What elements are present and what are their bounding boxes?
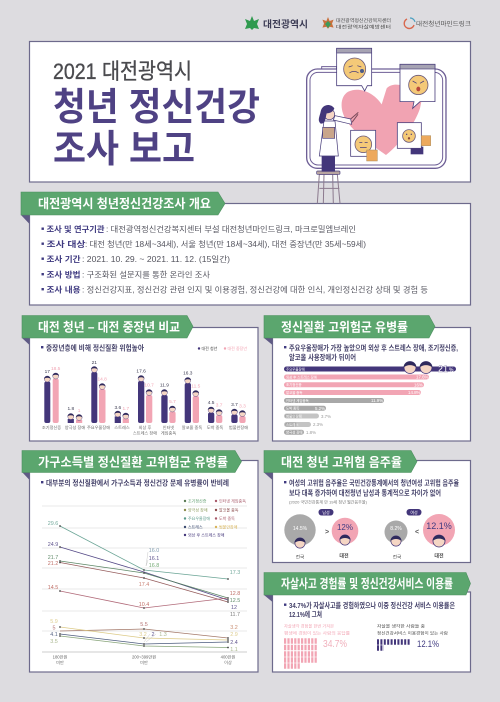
section tab: survey overview	[21, 192, 225, 224]
bar chart: 11.5	[191, 384, 201, 390]
bar chart: 3.3	[239, 404, 246, 410]
text: survey target: : 대전 청년(만 18세~34세), 서울 청년(만 18세~34세), 대전 중장년(만 35세~59세)	[85, 239, 366, 249]
comparison: male	[284, 509, 358, 560]
line chart: 10.4	[139, 602, 149, 608]
line chart: 17.3	[230, 570, 240, 576]
text: survey method	[42, 270, 210, 280]
line chart: 16.8	[149, 563, 159, 569]
bar chart: 1	[78, 408, 81, 414]
bubble: angry face	[400, 64, 435, 108]
x axis labels: 180만원	[53, 654, 67, 660]
lead text	[284, 601, 455, 619]
comparison: female: <	[415, 529, 419, 536]
horizontal bar chart: 스트레스	[286, 422, 298, 427]
text: survey period	[42, 254, 230, 264]
horizontal bar chart: 범불안장애	[286, 413, 302, 418]
bar chart: 4.5	[208, 400, 215, 406]
highlight: heads and 21 percent: %	[449, 368, 454, 374]
text: survey method: 조사 방법	[46, 270, 80, 280]
bar chart: 14.8	[98, 376, 107, 382]
legend: 대전 청년	[202, 345, 218, 351]
line chart: 14.5	[48, 585, 58, 591]
bar chart: 3.6	[114, 405, 121, 411]
title line 1: 2021 대전광역시	[53, 59, 192, 84]
lead text: 중장년층에 비해 정신질환 위험높아	[46, 344, 144, 352]
panel: survey overview	[30, 204, 470, 305]
text: survey target: 조사 대상	[46, 239, 86, 249]
line chart: 1.3	[159, 632, 167, 638]
bar chart: 알코올 중독	[182, 424, 202, 431]
horizontal bar chart: 3.7%	[321, 414, 331, 419]
line chart: 21.7	[48, 555, 58, 561]
comparison: female: 전국	[393, 554, 401, 560]
horizontal bar chart: 도박 중독	[286, 406, 299, 410]
tab heading: 대전 청년 – 대전 중장년 비교	[38, 320, 180, 334]
horizontal bar chart	[284, 362, 456, 435]
card: surprised face	[397, 123, 431, 154]
stat: 34.7 percent: 평생에 경험이 있는 사람의 응답률	[284, 630, 350, 636]
bar chart: 인터넷	[163, 424, 174, 431]
bar chart: 게임중독	[161, 430, 176, 436]
line chart: 5.9	[50, 619, 58, 625]
line chart: 2.4	[230, 640, 238, 646]
bar chart: 17.6	[136, 368, 146, 374]
horizontal bar chart: 주요우울장애	[286, 366, 305, 371]
bar chart: 주요우울장애	[87, 424, 110, 431]
chart legend: 알코올 중독	[219, 506, 239, 512]
grid lines	[42, 506, 247, 652]
horizontal bar chart: 알코올 중독	[286, 390, 303, 395]
text: survey method: : 구조화된 설문지를 통한 온라인 조사	[82, 270, 210, 280]
logo: Daejeon city	[245, 16, 308, 30]
comparison: female: 12.1%	[426, 521, 452, 531]
panel: suicidal ideation and service use	[264, 572, 470, 672]
line chart: 3.2	[230, 625, 238, 631]
tab heading	[22, 450, 242, 480]
text: survey period: 조사 기간	[46, 254, 80, 264]
lead text: 보다 대폭 증가하여 대전청년 남성과 통계적으로 차이가 없어	[289, 488, 441, 498]
line chart: 3.2	[139, 632, 147, 638]
logo: mental health welfare center	[322, 17, 391, 30]
comparison: male: 14.5%	[293, 526, 308, 532]
chart legend	[184, 498, 246, 538]
horizontal bar chart: 2.3%	[313, 422, 323, 427]
chart legend: 도박 중독	[219, 515, 235, 521]
lead text: (2020 국민건강통계 만 19세 청년 월간음주율)	[289, 500, 368, 504]
title line 2: 청년 정신건강	[53, 87, 260, 129]
bar chart: 1.7	[122, 406, 129, 412]
horizontal bar chart: 인터넷 게임중독	[286, 398, 309, 403]
lead text	[284, 478, 459, 504]
chart legend: 인터넷 게임중독	[219, 498, 246, 504]
line chart: 1.1	[230, 647, 238, 653]
bubble: crying face	[337, 48, 372, 91]
stat: 34.7 percent: 자살생각 경험을 한번 가져본	[284, 622, 334, 630]
bar chart: 스트레스 장애	[133, 430, 157, 436]
chart legend: 조기정신증	[188, 498, 207, 504]
x axis labels	[53, 654, 235, 666]
line chart: 16.0	[149, 548, 159, 554]
horizontal bar chart: 17.6%	[416, 374, 429, 380]
line chart: 29.6	[48, 521, 58, 527]
illustration: doctor and heart board	[307, 48, 446, 203]
lead text	[284, 344, 458, 362]
comparison: male: 12%	[337, 523, 353, 532]
stat: 12.1 percent: 자살을 생각한 사람들 중	[377, 622, 425, 630]
bar chart: 3.7	[231, 402, 238, 408]
lead text: 34.7%가 자살사고를 경험하였으나 이중 정신건강 서비스 이용률은	[289, 601, 455, 610]
stat: 12.1 percent: 정신건강서비스 이용경험이 있는 사람	[377, 630, 448, 636]
highlight: heads and 21 percent	[404, 362, 454, 374]
bar chart: 3.7	[216, 402, 223, 408]
bar chart: 조기정신증	[42, 424, 61, 431]
tab heading	[264, 316, 435, 345]
chart legend: 양극성 장애	[188, 506, 208, 512]
comparison: male: 남성	[322, 509, 330, 515]
card: flat face	[351, 130, 377, 161]
line chart: 2.9	[230, 632, 238, 638]
heart	[342, 85, 422, 155]
lead text: 알코올 사용장애가 뒤이어	[289, 353, 356, 362]
text: survey institution: 조사 및 연구기관	[46, 224, 104, 234]
bar chart	[42, 360, 248, 436]
lead text: 주요우울장애가 가장 높았으며 외상 후 스트레스 장애, 조기정신증,	[289, 344, 458, 352]
logo: Daejeon city: 대전광역시	[263, 18, 308, 30]
comparison: male: 대전	[339, 552, 349, 560]
chart legend: 스트레스	[188, 524, 203, 530]
highlight: heads and 21 percent: 21	[438, 364, 448, 374]
panel: daejeon youth vs middle-aged comparison	[22, 316, 258, 441]
comparison: female: 대전	[434, 552, 444, 560]
horizontal bar chart: 양극성 장애	[286, 430, 303, 434]
bar chart: 10.7	[144, 382, 154, 388]
line chart: 12.5	[230, 598, 240, 604]
lead text: 대부분의 정신질환에서 가구소득과 정신건강 문제 유병률이 반비례	[46, 478, 229, 488]
section tab: survey overview: 대전광역시 청년정신건강조사 개요	[38, 196, 211, 211]
horizontal bar chart: 14.8%	[408, 390, 421, 395]
stat: 34.7 percent	[284, 622, 350, 666]
board frame	[307, 67, 446, 168]
tab heading	[264, 572, 470, 602]
line chart: 4.1	[50, 632, 58, 638]
horizontal bar chart: 조기정신증	[286, 382, 302, 387]
text: survey content: 조사 내용	[46, 284, 80, 294]
horizontal bar chart: 5.2%	[315, 406, 325, 411]
bar chart: 양극성 장애	[65, 424, 85, 431]
panel: high-risk prevalence	[264, 316, 470, 441]
bar chart: 외상 후	[139, 424, 152, 431]
line chart	[48, 521, 240, 653]
bar chart: 도박 중독	[207, 424, 223, 431]
text: survey period: : 2021. 10. 29. ~ 2021. 11. 12. (15일간)	[82, 254, 230, 264]
comparison: male: >	[325, 529, 329, 536]
doctor figure	[317, 105, 358, 203]
line chart: 3.5	[50, 639, 58, 645]
x axis labels: 미만	[140, 659, 148, 666]
line chart: 17.4	[139, 582, 149, 588]
comparison: female: 여성	[410, 509, 418, 515]
legend: 대전 중장년	[228, 345, 247, 351]
horizontal bar chart: 16%	[414, 382, 423, 388]
panel: hero	[30, 42, 470, 182]
text: survey content: : 정신건강지표, 정신건강 관련 인지 및 이용경험, 정신건강에 대한 인식, 개인정신건강 상태 및 경험 등	[82, 284, 428, 294]
lead text: 12.1%에 그쳐	[289, 610, 322, 619]
x axis labels: 200~399만원	[132, 654, 156, 660]
legend	[198, 345, 247, 351]
logo: youth mind link: 대전청년마인드링크	[416, 20, 471, 28]
line chart: 5.5	[140, 622, 148, 628]
comparison: male: 전국	[296, 554, 304, 560]
tab heading: 정신질환 고위험군 유병률	[281, 320, 408, 334]
bar chart: 16.3	[183, 370, 193, 376]
logos	[245, 16, 471, 30]
chart legend: 외상 후 스트레스 장애	[188, 532, 225, 538]
panel: income-level prevalence	[22, 450, 258, 672]
line chart: 24.9	[48, 542, 58, 548]
bar chart: 1.8	[67, 406, 74, 412]
bar chart: 범불안장애	[229, 424, 248, 431]
line chart: 2	[152, 632, 154, 638]
comparison: female: 8.2%	[390, 526, 402, 532]
x axis labels: 400만원	[221, 654, 235, 660]
bar chart: 스트레스	[114, 424, 130, 431]
line chart: 12	[231, 605, 237, 611]
chart legend: 주요우울장애	[188, 515, 210, 521]
tab heading: 자살사고 경험률 및 정신건강서비스 이용률	[281, 576, 453, 591]
bar chart: 18.5	[51, 366, 61, 372]
tab heading: 대전 청년 고위험 음주율	[281, 454, 402, 470]
logo: youth mind link	[404, 18, 471, 28]
text: survey institution: : 대전광역정신건강복지센터 부설 대전청년마인드링크, 마크로밀엠브레인	[106, 224, 356, 234]
line chart: 16.1	[149, 556, 159, 562]
horizontal bar chart: 11.9%	[371, 398, 383, 403]
line chart: 12.8	[230, 591, 240, 597]
line chart: 11.7	[230, 612, 240, 618]
logo: mental health welfare center: 대전광역자살예방센터	[336, 24, 391, 30]
stat: 12.1 percent	[377, 622, 448, 650]
horizontal bar chart: 외상 후 스트레스 장애	[286, 374, 317, 379]
text: survey institution	[42, 224, 356, 234]
comparison: female	[384, 509, 455, 560]
bar chart: 17	[45, 369, 50, 375]
x axis labels: 미만	[56, 659, 64, 666]
title line 3: 조사 보고	[53, 129, 195, 171]
stat: 12.1 percent: 12.1%	[417, 639, 439, 650]
tab heading	[264, 450, 417, 480]
lead text: 여성의 고위험 음주율은 국민건강통계에서의 청년여성 고위험 음주율	[289, 478, 459, 488]
panel: high-risk drinking	[264, 450, 470, 562]
stat: 34.7 percent: 34.7%	[323, 639, 347, 650]
logo: mental health welfare center: 대전광역정신건강복지센터	[336, 17, 391, 24]
horizontal bar chart: 1.8%	[306, 430, 316, 435]
line chart: 5	[52, 626, 56, 632]
bar chart: 11.9	[160, 382, 169, 388]
bar chart: 5.7	[169, 399, 176, 405]
tab heading	[22, 316, 193, 345]
tab heading: 가구소득별 정신질환 고위험군 유병률	[38, 454, 228, 470]
chart legend: 범불안장애	[219, 524, 238, 530]
line chart: 21.2	[48, 561, 58, 567]
bar chart: 21	[92, 360, 97, 366]
x axis labels: 이상	[224, 659, 232, 666]
